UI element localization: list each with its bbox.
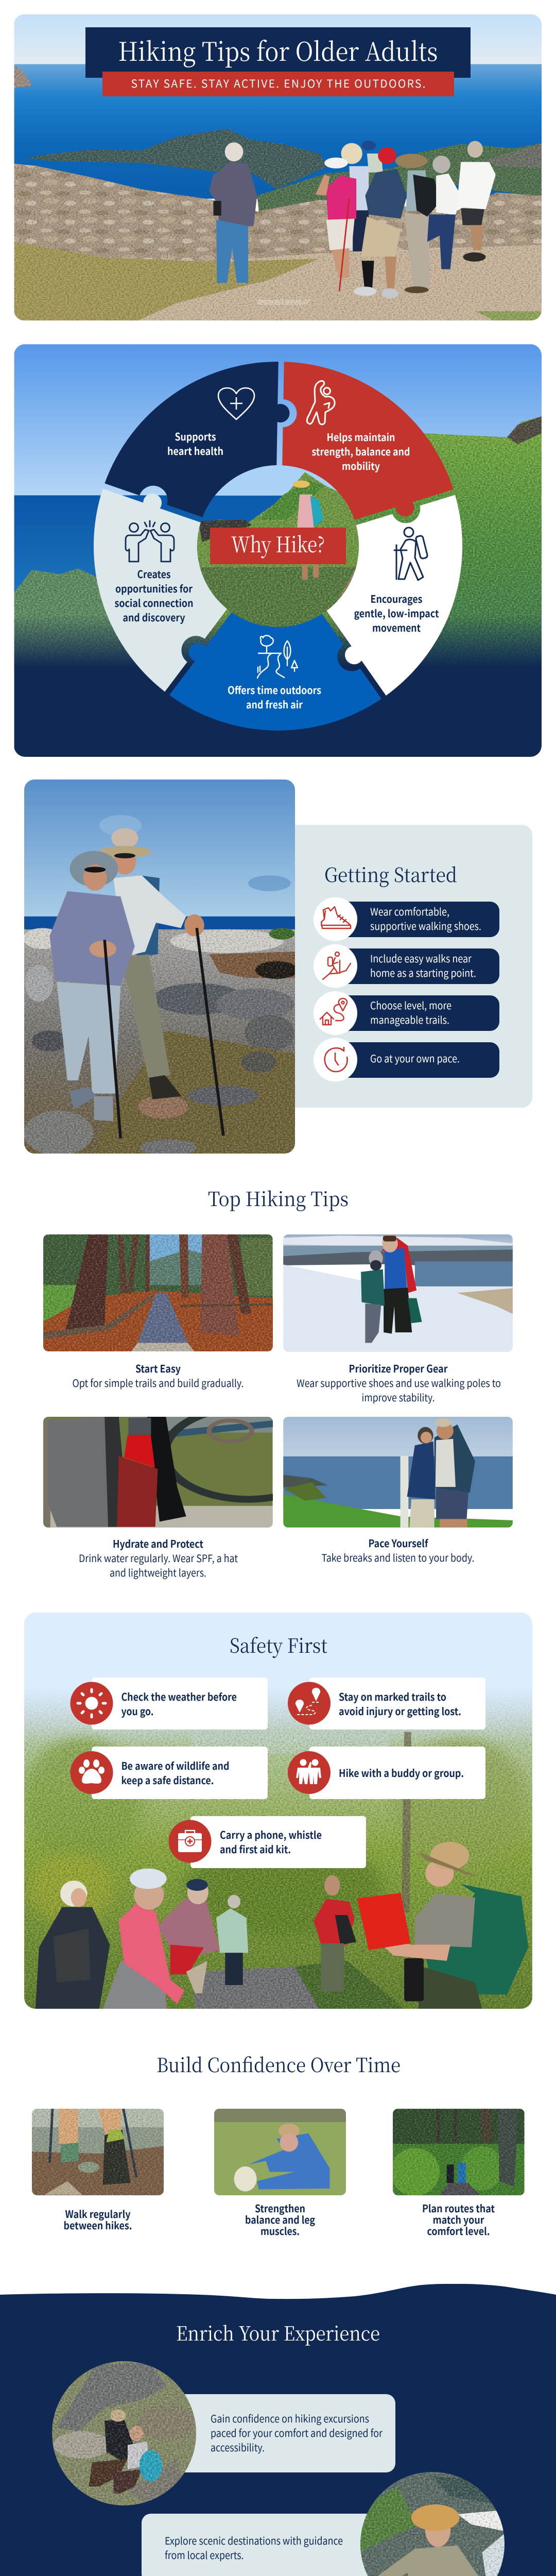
woman with sun hat: [49, 851, 135, 1121]
photo: couple on a forest path: [390, 2109, 525, 2196]
card: carry a phone: and first aid kit.: [220, 1841, 291, 1856]
photo: couple on snowy overlook: [283, 1234, 513, 1352]
card: carry a phone: Carry a phone, whistle: [220, 1827, 322, 1842]
text: social connection and discovery: and discovery: [123, 609, 185, 624]
tip: prioritize proper gear: improve stability.: [361, 1389, 435, 1404]
icon: heart with plus: [218, 388, 254, 419]
photo: woman stretching on the grass: [214, 2109, 346, 2195]
panel: getting started: [278, 825, 532, 1108]
hiker standing alone: [209, 142, 257, 283]
subtitle text: STAY SAFE. STAY ACTIVE. ENJOY THE OUTDOORS.: [131, 76, 425, 91]
pill: comfortable shoes: supportive walking shoes.: [370, 918, 481, 933]
title banner: [85, 27, 471, 78]
card: gain confidence: accessibility.: [211, 2439, 265, 2454]
card: stay on marked trails: [288, 1677, 485, 1730]
tip: hydrate and protect: Drink water regularly. Wear SPF, a hat: [79, 1550, 238, 1565]
tip: pace yourself: Take breaks and listen to your body.: [321, 1550, 475, 1565]
card: aware of wildlife: [70, 1747, 268, 1799]
card: hike with a buddy: [288, 1747, 485, 1799]
card: scenic destinations: Explore scenic destinations with guidance: [165, 2533, 343, 2548]
card: stay on marked trails: avoid injury or getting lost.: [339, 1703, 461, 1718]
text: social connection and discovery: [114, 566, 194, 624]
card: carry a phone: [169, 1816, 366, 1868]
text: time outdoors and fresh air: Offers time outdoors: [228, 682, 321, 697]
icon: stretching person: [307, 381, 335, 425]
panel: enrich your experience: [0, 2284, 556, 2576]
photo: backpack with red water bottle: [43, 1417, 273, 1528]
text: time outdoors and fresh air: [228, 682, 321, 711]
pill: go at your own pace: Go at your own pace.: [370, 1050, 460, 1065]
photo: trail shoes with poles: [32, 2109, 164, 2195]
card: gain confidence: [154, 2394, 395, 2472]
pill: easy walks near home: Include easy walks near: [370, 951, 472, 965]
card: stay on marked trails: Stay on marked trails to: [339, 1689, 446, 1704]
pill: level manageable trails: Choose level, more: [370, 997, 451, 1012]
tip: prioritize proper gear: [297, 1361, 501, 1404]
card: scenic destinations: [142, 2514, 399, 2576]
text: strength balance mobility: strength, balance and: [312, 444, 410, 459]
hero photo: hikers overlooking the sea: [14, 14, 543, 322]
text: gentle low-impact movement: movement: [372, 620, 421, 635]
pill: level manageable trails: manageable trails.: [370, 1012, 449, 1027]
heading: getting started: Getting Started: [324, 859, 457, 888]
text: gentle low-impact movement: gentle, low-impact: [354, 605, 439, 620]
item: walk regularly: Walk regularly: [65, 2206, 131, 2221]
pill: easy walks near home: home as a starting point.: [370, 965, 476, 980]
photo: ranger with mountains behind: [358, 2471, 507, 2576]
ring diagram: benefits of hiking: [91, 359, 465, 734]
item: strengthen balance: Strengthen: [255, 2200, 305, 2215]
text: time outdoors and fresh air: and fresh air: [246, 697, 303, 711]
photo: smiling couple with trekking poles: [23, 779, 298, 1156]
heading: build confidence over time: Build Confidence Over Time: [157, 2049, 401, 2078]
tip: pace yourself: Pace Yourself: [369, 1535, 429, 1550]
title text: Hiking Tips for Older Adults: [118, 31, 438, 69]
item: plan routes: [422, 2200, 495, 2238]
item: plan routes: comfort level.: [427, 2223, 490, 2238]
panel: why hike background photo: [14, 344, 543, 758]
icon: home and route pin: [320, 998, 347, 1025]
card: gain confidence: Gain confidence on hiking excursions: [211, 2411, 369, 2426]
photo: couple by the ocean: [283, 1417, 513, 1528]
tip: start easy: Opt for simple trails and build gradually.: [72, 1375, 244, 1390]
text: social connection and discovery: Creates: [137, 566, 171, 581]
text: strength balance mobility: Helps maintain: [326, 429, 395, 444]
tip: hydrate and protect: and lightweight layers.: [110, 1565, 206, 1580]
heading: safety first: Safety First: [230, 1630, 327, 1658]
item: walk regularly: [64, 2206, 132, 2232]
card: gain confidence: paced for your comfort and designed for: [211, 2425, 383, 2440]
icon: hiker with backpack: [394, 528, 428, 580]
ring segments: [91, 359, 465, 734]
text: gentle low-impact movement: [354, 591, 439, 635]
card: aware of wildlife: keep a safe distance.: [121, 1772, 214, 1787]
photo: couple resting on rocks: [49, 2360, 199, 2507]
man with wide-brim hat: [98, 828, 204, 1099]
item: strengthen balance: balance and leg: [245, 2212, 315, 2227]
pill: comfortable shoes: [314, 897, 499, 941]
text: strength balance mobility: [312, 429, 410, 473]
tip: prioritize proper gear: Wear supportive shoes and use walking poles to: [297, 1375, 501, 1390]
text: supports heart health: heart health: [167, 443, 223, 458]
tip: pace yourself: [321, 1535, 475, 1565]
card: check the weather: you go.: [121, 1703, 153, 1718]
man in red vest: [314, 1875, 356, 1992]
icon: hiking boot: [321, 907, 351, 928]
icon: two people: [296, 1759, 321, 1784]
tip: hydrate and protect: [79, 1536, 238, 1580]
icon: paw print: [79, 1759, 105, 1784]
text: strength balance mobility: mobility: [342, 458, 380, 473]
tip: start easy: Start Easy: [135, 1361, 181, 1376]
heading: enrich your experience: Enrich Your Experience: [176, 2318, 380, 2346]
item: strengthen balance: muscles.: [260, 2223, 300, 2238]
icon: route between map pins: [296, 1688, 320, 1715]
why hike centre photo: hiker on coastal path: [195, 464, 361, 629]
card: check the weather: Check the weather before: [121, 1689, 237, 1704]
pill: go at your own pace: [314, 1038, 499, 1082]
icon: sun: [78, 1689, 106, 1717]
group of hikers on the left: [36, 1869, 248, 2009]
text: gentle low-impact movement: Encourages: [371, 591, 423, 606]
text: social connection and discovery: social connection: [114, 595, 194, 610]
why hike label: Why Hike?: [231, 528, 325, 559]
icon: two people high five: [126, 521, 174, 562]
card: aware of wildlife: Be aware of wildlife and: [121, 1758, 230, 1773]
icon: hiker on slope: [323, 952, 351, 979]
heading: top hiking tips: Top Hiking Tips: [208, 1183, 349, 1212]
subtitle banner: [102, 72, 454, 96]
photo: forest path: [43, 1234, 273, 1351]
pill: easy walks near home: [314, 944, 499, 988]
item: strengthen balance: [245, 2200, 315, 2238]
icon: first aid kit: [178, 1831, 202, 1852]
card: hike with a buddy: Hike with a buddy or group.: [339, 1765, 464, 1780]
pill: level manageable trails: [314, 991, 499, 1035]
text: supports heart health: Supports: [175, 429, 216, 444]
group of hikers: [316, 141, 496, 298]
panel: safety first photo: [21, 1613, 532, 2009]
pill: comfortable shoes: Wear comfortable,: [370, 904, 449, 919]
item: plan routes: Plan routes that: [422, 2200, 495, 2215]
icon: clock: [325, 1047, 348, 1072]
icon: trees and winding path: [257, 636, 298, 678]
tip: hydrate and protect: Hydrate and Protect: [113, 1536, 204, 1551]
tip: prioritize proper gear: Prioritize Proper Gear: [349, 1361, 448, 1376]
item: walk regularly: between hikes.: [64, 2217, 132, 2232]
tip: start easy: [72, 1361, 244, 1390]
card: scenic destinations: from local experts.: [165, 2547, 244, 2562]
card: check the weather: [70, 1677, 268, 1730]
text: social connection and discovery: opportunities for: [115, 581, 193, 596]
text: supports heart health: [167, 429, 223, 458]
item: plan routes: match your: [432, 2212, 484, 2227]
ranger with red clipboard: [357, 1842, 528, 2009]
